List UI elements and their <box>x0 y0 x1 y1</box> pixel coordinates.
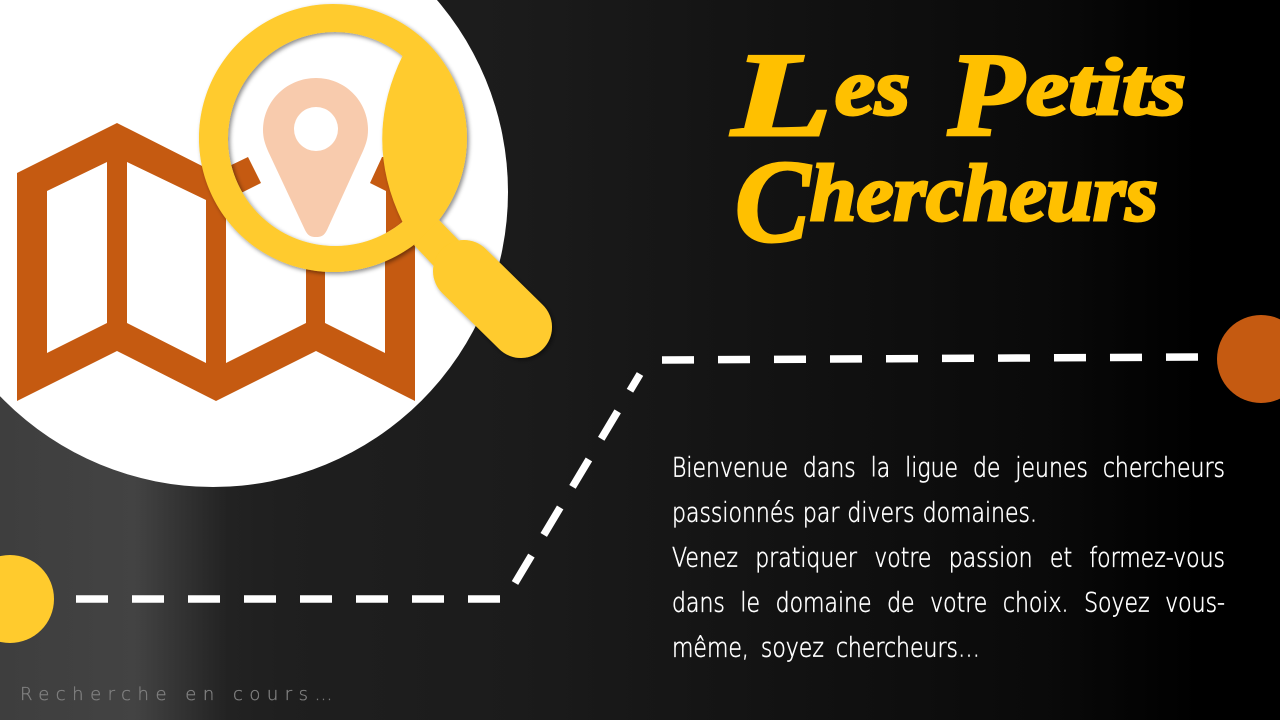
body text: passionnés <box>672 499 795 529</box>
body text: votre <box>874 544 931 574</box>
body text: ligue <box>905 454 958 484</box>
body text: Soyez <box>1084 589 1150 619</box>
body text: même, <box>672 634 749 664</box>
body text: de <box>973 454 1000 484</box>
body text: la <box>871 454 890 484</box>
body text: domaine <box>776 589 872 619</box>
body text: formez-vous <box>1089 544 1225 574</box>
body text: Bienvenue <box>672 454 788 484</box>
body text: votre <box>930 589 987 619</box>
title: etits <box>1026 44 1186 132</box>
title <box>731 28 1186 267</box>
body text: divers <box>847 499 915 529</box>
body text: domaines. <box>923 499 1037 529</box>
title: P <box>947 28 1026 161</box>
title: hercheurs <box>810 150 1158 238</box>
white circle <box>0 0 508 487</box>
body text: vous- <box>1165 589 1225 619</box>
body text: dans <box>803 454 856 484</box>
orange circle <box>1217 315 1280 403</box>
dashed path <box>76 357 1198 599</box>
body text: et <box>1050 544 1072 574</box>
body text: passion <box>949 544 1033 574</box>
body text: chercheurs <box>1103 454 1225 484</box>
title: L <box>731 28 832 161</box>
body text: pratiquer <box>755 544 857 574</box>
location pin <box>263 78 368 237</box>
icon: magnifying glass <box>199 4 521 327</box>
lens interior <box>227 31 443 247</box>
body text: soyez <box>761 634 824 664</box>
body text: jeunes <box>1015 454 1088 484</box>
body text: chercheurs… <box>836 634 980 664</box>
icon: folded map <box>17 123 415 401</box>
footer caption: Recherche en cours… <box>20 684 339 705</box>
title: C <box>735 136 811 267</box>
body text: par <box>803 499 839 529</box>
body text: dans <box>672 589 725 619</box>
title: es <box>835 44 910 132</box>
yellow circle <box>0 555 54 643</box>
body text: le <box>740 589 760 619</box>
body text: Venez <box>672 544 738 574</box>
lens frame and handle <box>199 4 521 327</box>
map fragments inside lens <box>231 157 402 233</box>
body text: de <box>887 589 915 619</box>
body text: choix. <box>1003 589 1069 619</box>
